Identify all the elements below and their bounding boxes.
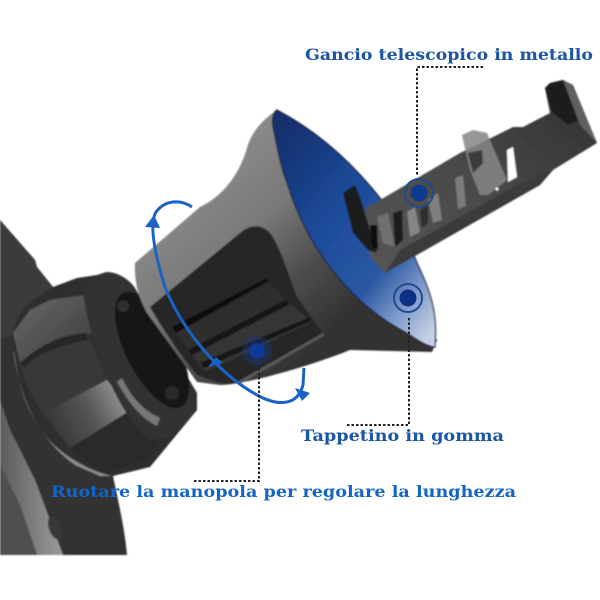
translucent slider bbox=[462, 130, 507, 195]
black slider clip bbox=[343, 185, 377, 253]
hook window bbox=[507, 147, 517, 182]
nut flange ring bbox=[83, 272, 197, 440]
leader line: knob bbox=[194, 368, 259, 481]
rotation arrow bbox=[145, 202, 310, 403]
telescopic metal hook bbox=[343, 80, 597, 273]
hook end tab bbox=[545, 80, 580, 125]
back plate of the mount bbox=[0, 220, 127, 555]
suction disc rubber pad bbox=[272, 110, 436, 347]
marker: knob bbox=[242, 336, 272, 366]
label: rubber pad: Tappetino in gomma bbox=[301, 426, 504, 445]
leader line: rubber pad bbox=[346, 318, 409, 425]
hook slots bbox=[377, 213, 395, 247]
marker: hook bbox=[405, 179, 433, 207]
rotary knob with ribs bbox=[150, 226, 325, 384]
leader line: hook bbox=[417, 67, 483, 175]
label: metal telescopic hook: Gancio telescopico in metallo bbox=[305, 45, 593, 64]
label: rotate the knob: Ruotare la manopola per regolare la lunghezza bbox=[51, 482, 516, 501]
adjustment cone body bbox=[135, 110, 437, 385]
marker: rubber pad bbox=[394, 284, 422, 312]
ball joint nut bbox=[13, 272, 204, 476]
mount illustration bbox=[0, 80, 597, 555]
